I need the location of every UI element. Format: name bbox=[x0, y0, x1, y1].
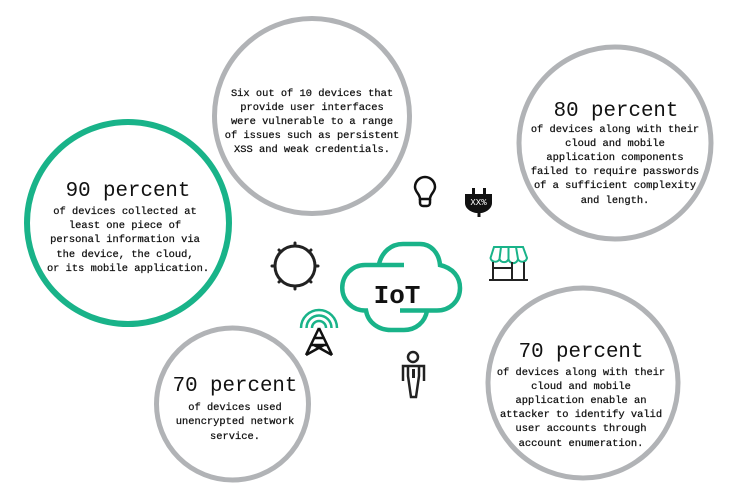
body text: cloud and mobile bbox=[565, 138, 665, 150]
body text: unencrypted network bbox=[176, 416, 294, 428]
body text: application components bbox=[546, 152, 684, 164]
icon: person bbox=[403, 352, 424, 397]
body text: and length. bbox=[581, 195, 649, 207]
body text bbox=[497, 367, 665, 450]
body text: application enable an bbox=[516, 395, 646, 407]
heading: 70 percent bbox=[173, 375, 297, 398]
body text bbox=[225, 88, 399, 156]
ring bbox=[27, 122, 229, 324]
body text: of a sufficient complexity bbox=[534, 180, 696, 192]
body text bbox=[47, 206, 209, 275]
panel: 70 percent accounts bbox=[488, 288, 678, 478]
awning bbox=[490, 247, 527, 263]
body text: the device, the cloud, bbox=[56, 249, 194, 261]
heading: 80 percent bbox=[554, 100, 678, 123]
icon: light bulb bbox=[415, 177, 435, 206]
panel: six out of 10 bbox=[214, 18, 410, 214]
panel: 80 percent bbox=[519, 47, 711, 239]
tower bbox=[306, 328, 332, 355]
body text: failed to require passwords bbox=[531, 166, 699, 178]
icon: IoT cloud bbox=[342, 244, 460, 330]
body text: personal information via bbox=[50, 234, 200, 246]
ring bbox=[488, 288, 678, 478]
cloud label: IoT bbox=[374, 281, 420, 311]
body text: of devices used bbox=[188, 402, 282, 414]
body text: of issues such as persistent bbox=[225, 130, 399, 142]
cloud outline bbox=[342, 244, 460, 330]
body text bbox=[531, 124, 699, 207]
body text: least one piece of bbox=[69, 220, 181, 232]
icon: signal tower bbox=[301, 310, 337, 355]
body text: service. bbox=[210, 431, 260, 443]
wifi arcs bbox=[301, 310, 337, 328]
body text: of devices collected at bbox=[53, 206, 197, 218]
heading: 90 percent bbox=[66, 180, 190, 203]
body text: of devices along with their bbox=[531, 124, 699, 136]
body text bbox=[176, 402, 294, 443]
body text: user accounts through bbox=[516, 423, 646, 435]
ring bbox=[519, 47, 711, 239]
icon: storefront bbox=[489, 247, 528, 280]
body text: were vulnerable to a range bbox=[231, 116, 393, 128]
body text: XSS and weak credentials. bbox=[234, 144, 390, 156]
body text: Six out of 10 devices that bbox=[231, 88, 393, 100]
plug label: XX% bbox=[470, 198, 487, 208]
icon: plug XX% bbox=[465, 188, 492, 217]
body text: account enumeration. bbox=[519, 438, 643, 450]
body text: cloud and mobile bbox=[531, 381, 631, 393]
ring bbox=[214, 18, 410, 214]
body text: of devices along with their bbox=[497, 367, 665, 379]
body text: or its mobile application. bbox=[47, 263, 209, 275]
ring bbox=[156, 328, 308, 480]
plug body bbox=[465, 188, 492, 217]
panel: 90 percent bbox=[27, 122, 229, 324]
body text: attacker to identify valid bbox=[500, 409, 662, 421]
icon: sun / gear bbox=[272, 243, 318, 289]
building bbox=[489, 262, 528, 280]
body text: provide user interfaces bbox=[240, 102, 384, 114]
panel: 70 percent network bbox=[156, 328, 308, 480]
heading: 70 percent bbox=[519, 341, 643, 364]
